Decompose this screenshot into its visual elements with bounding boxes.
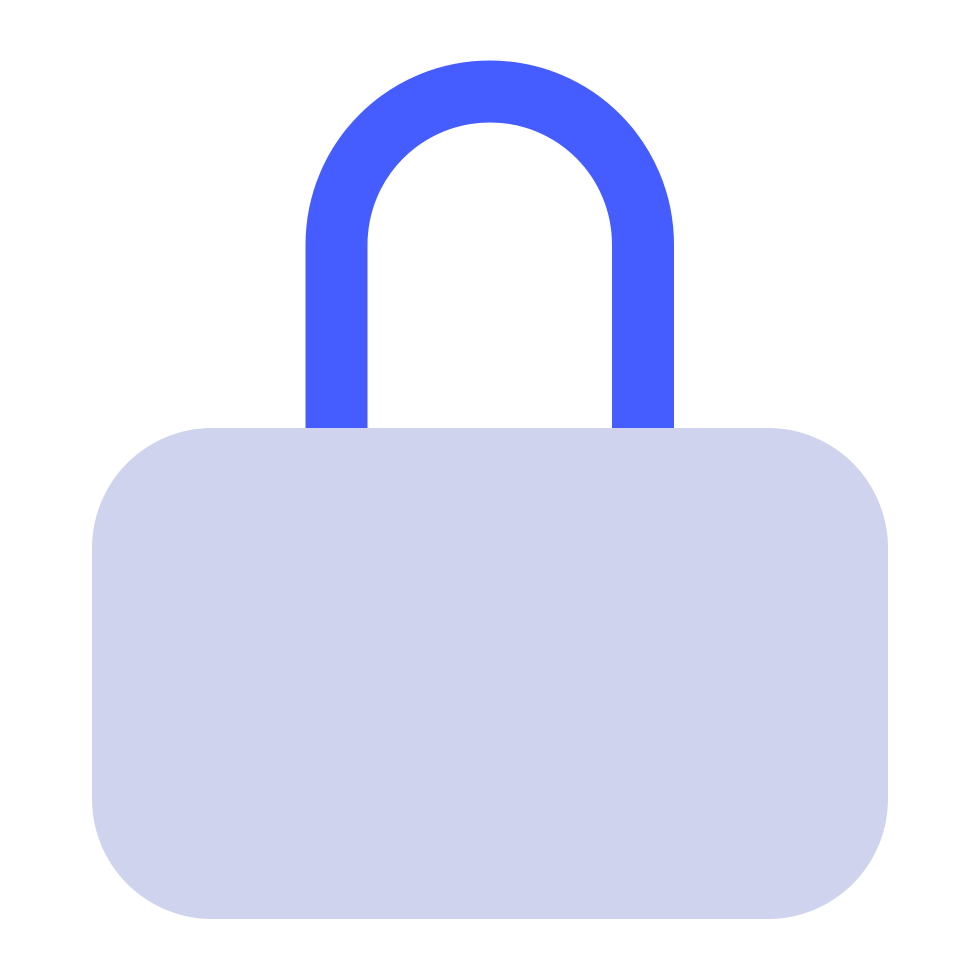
- icon: padlock body: [92, 428, 888, 919]
- icon: padlock shackle: [336, 92, 643, 430]
